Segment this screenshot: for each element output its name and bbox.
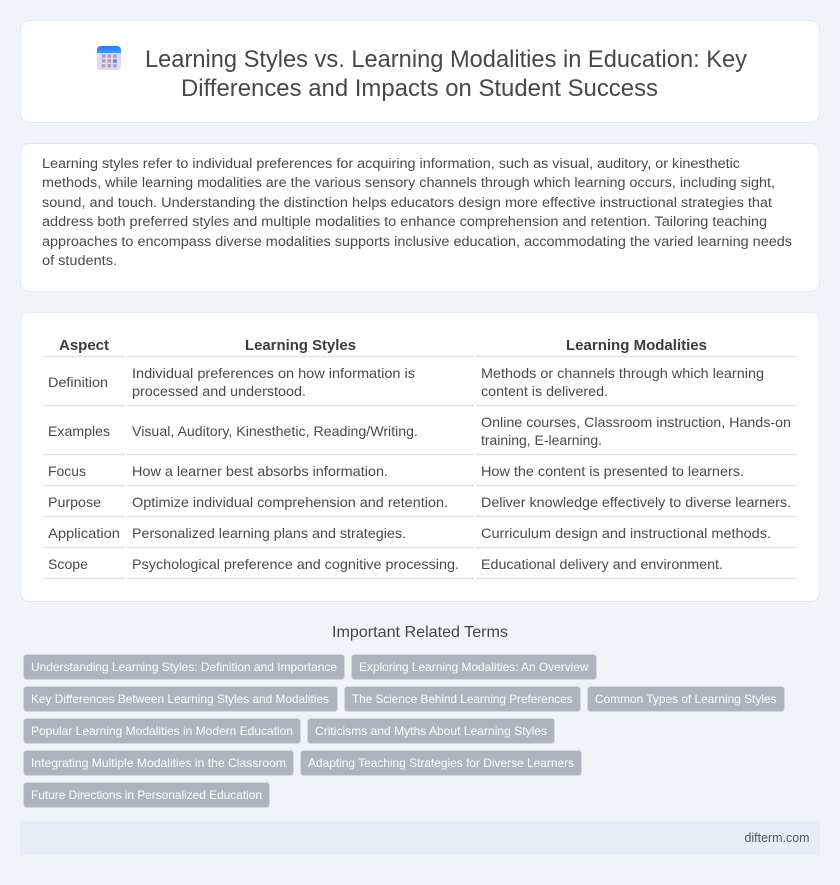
- panel: comparison table: [20, 312, 820, 602]
- row: examples: Online courses, Classroom instruction, Hands-on: [481, 414, 791, 430]
- row: definition: Methods or channels through which learning: [481, 365, 764, 381]
- row: definition: Individual preferences on how information is: [132, 365, 415, 381]
- related term tags: Key Differences Between Learning Styles and Modalities: [31, 692, 329, 706]
- footer: difterm.com: [744, 831, 810, 845]
- row: definition: content is delivered.: [481, 383, 608, 399]
- text block: introduction paragraph: methods, while learning modalities are the various sensory channels through which learning occurs, including sight,: [42, 175, 775, 191]
- row: scope: Educational delivery and environment.: [481, 556, 723, 572]
- text block: introduction paragraph: Learning styles refer to individual preferences for acquiring information, such as visual, auditory, or kinesthetic: [42, 156, 740, 172]
- title: Learning Styles vs. Learning Modalities in Education: Key: [145, 47, 747, 73]
- text block: introduction paragraph: of students.: [42, 253, 117, 269]
- row: examples: training, E-learning.: [481, 432, 602, 448]
- text block: introduction paragraph: approaches to encompass diverse modalities supports inclusive education, accommodating the varied learning needs: [42, 234, 792, 250]
- table header: Aspect: [59, 338, 109, 354]
- title: [145, 47, 747, 102]
- related term tags: [24, 654, 784, 808]
- row: application: [48, 525, 771, 541]
- related term tags: Popular Learning Modalities in Modern Education: [31, 724, 293, 738]
- row: application: Application: [48, 525, 120, 541]
- table header: Learning Modalities: [566, 338, 707, 354]
- row: definition: processed and understood.: [132, 383, 306, 399]
- row: purpose: Purpose: [48, 494, 101, 510]
- table header: Learning Styles: [245, 338, 356, 354]
- row: purpose: Optimize individual comprehension and retention.: [132, 494, 448, 510]
- table header: [59, 338, 707, 354]
- row: focus: How the content is presented to learners.: [481, 463, 744, 479]
- title: Differences and Impacts on Student Success: [181, 76, 658, 102]
- text block: introduction paragraph: [42, 156, 792, 269]
- panel: introduction: [20, 144, 820, 292]
- related term tags: The Science Behind Learning Preferences: [352, 692, 572, 706]
- icon: calendar: [97, 46, 121, 70]
- row: examples: Visual, Auditory, Kinesthetic, Reading/Writing.: [132, 423, 418, 439]
- row: focus: How a learner best absorbs information.: [132, 463, 388, 479]
- related term tags: Exploring Learning Modalities: An Overview: [359, 660, 589, 674]
- related term tags: Adapting Teaching Strategies for Diverse Learners: [308, 756, 574, 770]
- row: application: Curriculum design and instructional methods.: [481, 525, 771, 541]
- related term tags: Common Types of Learning Styles: [595, 692, 776, 706]
- row: application: Personalized learning plans and strategies.: [132, 525, 406, 541]
- text block: introduction paragraph: sound, and touch. Understanding the distinction helps educators design more effective instructional strategies that: [42, 195, 772, 211]
- footer: [20, 821, 820, 855]
- panel: header: [20, 20, 820, 122]
- related term tags: Criticisms and Myths About Learning Styles: [315, 724, 547, 738]
- row: definition: Definition: [48, 374, 108, 390]
- row: scope: Scope: [48, 556, 88, 572]
- row: definition: [48, 365, 764, 399]
- row: scope: Psychological preference and cognitive processing.: [132, 556, 459, 572]
- row: examples: [48, 414, 791, 448]
- related term tags: Understanding Learning Styles: Definition and Importance: [31, 660, 337, 674]
- row: focus: [48, 463, 744, 479]
- row: focus: Focus: [48, 463, 86, 479]
- row: purpose: [48, 494, 791, 510]
- row: scope: [48, 556, 723, 572]
- related term tags: Integrating Multiple Modalities in the Classroom: [31, 756, 286, 770]
- row: purpose: Deliver knowledge effectively to diverse learners.: [481, 494, 791, 510]
- related term tags: Future Directions in Personalized Education: [31, 788, 262, 802]
- row: examples: Examples: [48, 423, 110, 439]
- text block: introduction paragraph: address both preferred styles and multiple modalities to enhance comprehension and retention. Tailoring teaching: [42, 214, 767, 230]
- heading: important related terms: Important Related Terms: [332, 624, 508, 641]
